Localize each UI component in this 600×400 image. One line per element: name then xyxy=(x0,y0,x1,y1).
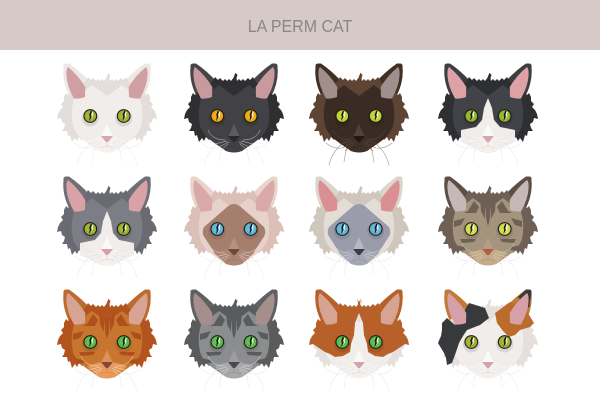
tabby stripes xyxy=(73,310,141,364)
cat: red tabby xyxy=(57,290,157,391)
cat: grey and white xyxy=(57,176,157,278)
cat: black xyxy=(184,64,284,165)
white bib xyxy=(80,211,134,266)
cat: brown tabby xyxy=(438,176,538,278)
cat: chocolate xyxy=(309,64,409,165)
tabby stripes xyxy=(200,310,268,364)
header band xyxy=(0,0,600,50)
title: LA PERM CAT xyxy=(248,16,352,36)
orange patch xyxy=(495,302,534,337)
cat: grey tabby xyxy=(184,290,284,391)
tabby stripes xyxy=(454,197,522,251)
cat: lilac point xyxy=(184,176,284,278)
cat: calico xyxy=(438,290,538,391)
red patches xyxy=(309,299,409,357)
cat: white xyxy=(57,64,157,165)
cat: red and white xyxy=(309,290,409,391)
cat: blue point xyxy=(309,176,409,278)
blue face mask xyxy=(328,204,390,266)
cat: black and white xyxy=(438,64,538,165)
white bib xyxy=(461,98,515,152)
dark ear tip xyxy=(518,290,532,308)
dark face mask xyxy=(203,204,265,266)
black patch xyxy=(438,303,489,365)
